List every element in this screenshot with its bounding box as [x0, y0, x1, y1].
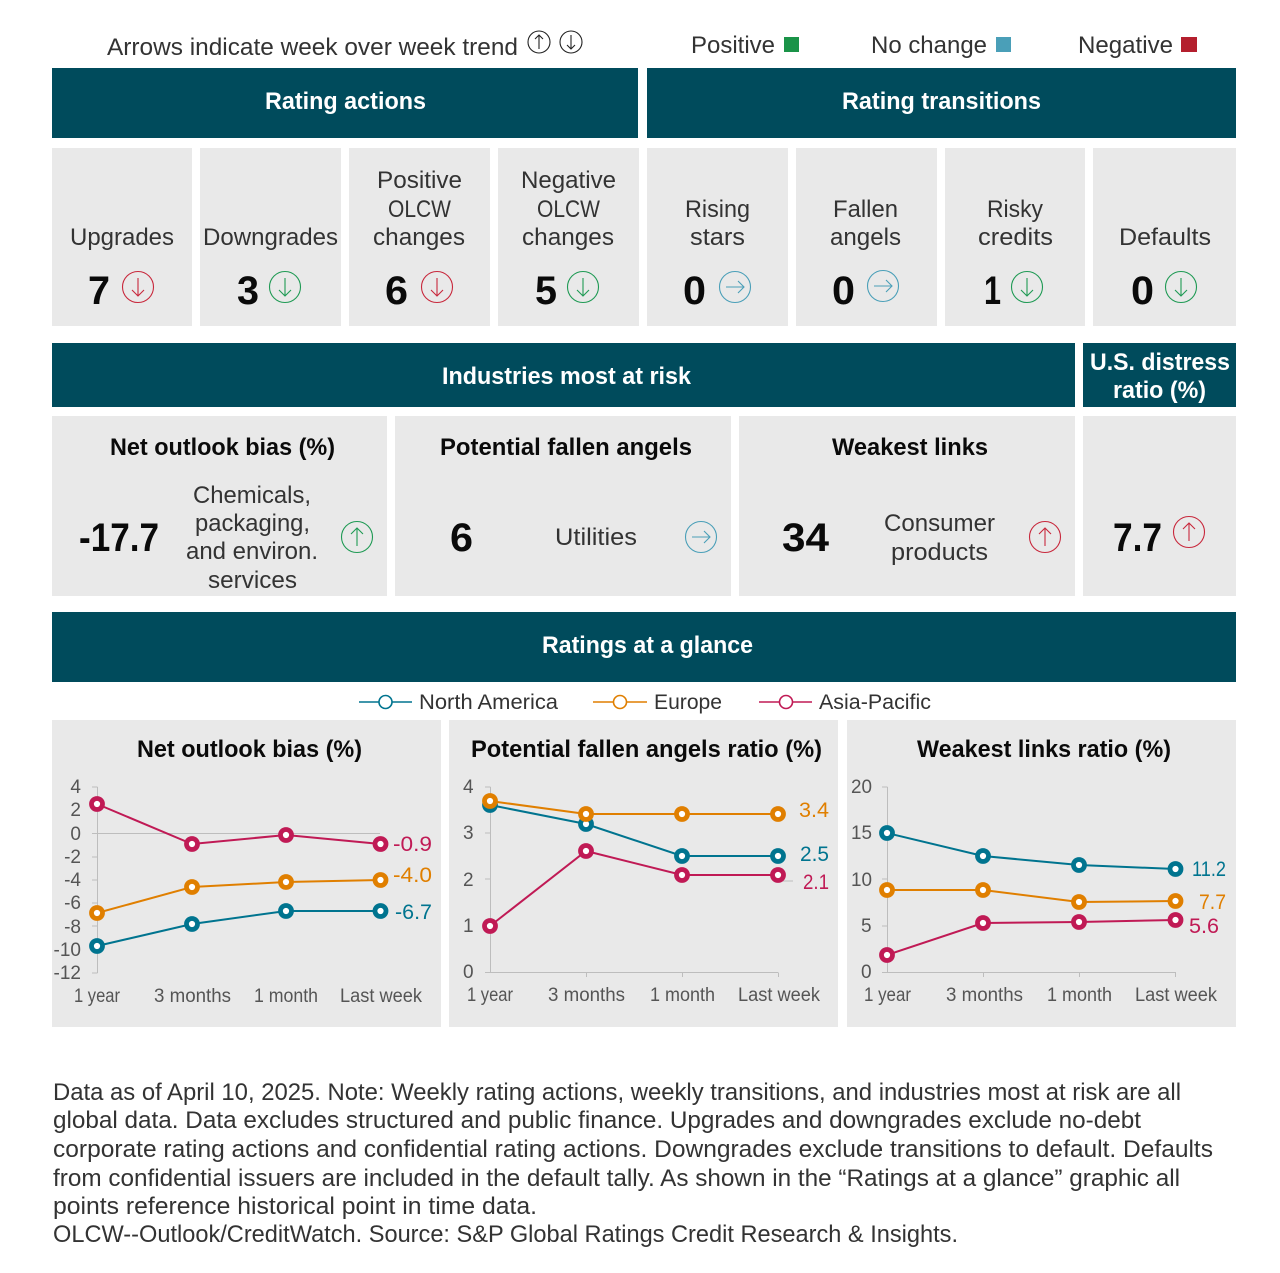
card: fallen angels: 0 — [832, 269, 855, 313]
panel: potential fallen angels: 6 — [450, 516, 473, 560]
card: rising stars: 0 — [683, 269, 706, 313]
footnote: points reference historical point in time data. — [53, 1193, 537, 1220]
card: positive OLCW changes: Positive — [377, 167, 462, 194]
chart legend: Asia-Pacific: Asia-Pacific — [819, 691, 931, 714]
chart panel: net outlook bias: -10 — [54, 940, 81, 961]
chart panel: weakest links ratio: Last week — [1135, 985, 1217, 1006]
header: U.S. distress ratio: ratio (%) — [1113, 377, 1206, 404]
legend: positive: Positive — [691, 32, 775, 59]
chart panel: potential fallen angels ratio: 1 year — [467, 985, 514, 1006]
chart panel: potential fallen angels ratio: 3.4 — [799, 799, 829, 822]
card: upgrades — [52, 148, 192, 326]
card: rising stars: Rising — [685, 196, 750, 223]
chart panel: potential fallen angels ratio: 1 — [463, 916, 474, 937]
chart legend: Europe: Europe — [654, 691, 722, 714]
chart legend: Asia-Pacific — [759, 691, 931, 714]
chart panel: net outlook bias: -6 — [64, 893, 81, 914]
panel: U.S. distress ratio: 7.7 — [1113, 516, 1162, 560]
chart legend: Europe — [593, 691, 722, 714]
panel: potential fallen angels — [395, 416, 731, 596]
panel: potential fallen angels: Utilities — [555, 524, 637, 551]
chart panel: net outlook bias — [52, 720, 441, 1027]
header: rating actions — [52, 68, 638, 138]
footnote: corporate rating actions and confidential rating actions. Downgrades exclude transitions to default. Defaults — [53, 1136, 1213, 1163]
card: risky credits — [945, 148, 1085, 326]
chart panel: net outlook bias: Net outlook bias (%) — [137, 736, 362, 763]
chart panel: potential fallen angels ratio: 2.5 — [800, 843, 829, 866]
chart panel: potential fallen angels ratio — [449, 720, 838, 1027]
chart panel: weakest links ratio: 15 — [851, 823, 872, 844]
panel: net outlook bias: Chemicals, — [193, 482, 311, 509]
footnote: global data. Data excludes structured and public finance. Upgrades and downgrades exclude no-debt — [53, 1107, 1141, 1134]
card: risky credits: 1 — [984, 269, 1001, 313]
chart panel: potential fallen angels ratio: Last week — [738, 985, 820, 1006]
chart panel: potential fallen angels ratio: 4 — [463, 777, 474, 798]
header: U.S. distress ratio: U.S. distress — [1090, 349, 1230, 376]
card: positive OLCW changes: OLCW — [388, 196, 451, 223]
card: defaults: Defaults — [1119, 224, 1211, 251]
chart panel: net outlook bias: -4 — [64, 870, 81, 891]
panel: net outlook bias: Net outlook bias (%) — [110, 434, 335, 461]
chart panel: potential fallen angels ratio: 3 — [463, 823, 474, 844]
chart panel: potential fallen angels ratio: 0 — [463, 962, 474, 983]
header: U.S. distress ratio — [1083, 343, 1236, 407]
legend: negative: Negative — [1078, 32, 1173, 59]
chart panel: weakest links ratio: 3 months — [946, 985, 1023, 1006]
card: downgrades: Downgrades — [203, 224, 338, 251]
chart panel: potential fallen angels ratio: Potential fallen angels ratio (%) — [471, 736, 822, 763]
card: upgrades: Upgrades — [70, 224, 174, 251]
chart panel: potential fallen angels ratio: 2.1 — [803, 871, 829, 894]
panel: net outlook bias: -17.7 — [79, 516, 159, 560]
card: fallen angels: angels — [830, 224, 901, 251]
chart panel: potential fallen angels ratio: 3 months — [548, 985, 625, 1006]
chart panel: net outlook bias: Last week — [340, 986, 422, 1007]
card: positive OLCW changes: changes — [373, 224, 465, 251]
card: negative OLCW changes — [498, 148, 639, 326]
header: rating actions: Rating actions — [265, 88, 426, 115]
footnote: OLCW--Outlook/CreditWatch. Source: S&P Global Ratings Credit Research & Insights. — [53, 1221, 958, 1248]
panel: weakest links: Consumer — [884, 510, 995, 537]
chart panel: net outlook bias: -6.7 — [395, 901, 432, 924]
chart panel: net outlook bias: 1 month — [254, 986, 318, 1007]
chart panel: net outlook bias: -12 — [54, 963, 81, 984]
panel: net outlook bias: services — [208, 567, 297, 594]
card: risky credits: credits — [978, 224, 1053, 251]
chart panel: net outlook bias: 0 — [70, 824, 81, 845]
chart panel: weakest links ratio: 10 — [851, 870, 872, 891]
chart panel: net outlook bias: -2 — [64, 847, 81, 868]
card: fallen angels — [796, 148, 937, 326]
chart panel: net outlook bias: -8 — [64, 917, 81, 938]
header: ratings at a glance: Ratings at a glance — [542, 632, 753, 659]
panel: weakest links: products — [891, 539, 988, 566]
panel: weakest links — [739, 416, 1075, 596]
card: negative OLCW changes: 5 — [535, 269, 557, 313]
card: downgrades — [200, 148, 341, 326]
card: negative OLCW changes: changes — [522, 224, 614, 251]
header: industries most at risk — [52, 343, 1075, 407]
chart panel: potential fallen angels ratio: 1 month — [650, 985, 715, 1006]
chart panel: weakest links ratio: 7.7 — [1199, 891, 1226, 914]
panel: U.S. distress ratio — [1083, 416, 1236, 596]
card: defaults — [1093, 148, 1236, 326]
panel: weakest links: Weakest links — [832, 434, 988, 461]
card: negative OLCW changes: Negative — [521, 167, 616, 194]
legend: no change: No change — [871, 32, 987, 59]
footnote: from confidential issuers are included in the default tally. As shown in the “Ratings at a glance” graphic all — [53, 1165, 1180, 1192]
header: industries most at risk: Industries most at risk — [442, 363, 692, 390]
chart panel: potential fallen angels ratio: 2 — [463, 870, 474, 891]
panel: potential fallen angels: Potential fallen angels — [440, 434, 692, 461]
panel: weakest links: 34 — [782, 516, 830, 560]
chart panel: net outlook bias: 1 year — [74, 986, 121, 1007]
chart panel: weakest links ratio: 5 — [861, 916, 872, 937]
arrows key: Arrows indicate week over week trend — [107, 34, 518, 61]
chart panel: weakest links ratio: Weakest links ratio (%) — [917, 736, 1171, 763]
chart panel: net outlook bias: -4.0 — [393, 864, 432, 887]
header: rating transitions — [647, 68, 1236, 138]
card: rising stars: stars — [690, 224, 745, 251]
card: defaults: 0 — [1131, 269, 1154, 313]
chart panel: weakest links ratio: 1 month — [1047, 985, 1112, 1006]
chart panel: weakest links ratio — [847, 720, 1236, 1027]
panel: net outlook bias — [52, 416, 387, 596]
card: rising stars — [647, 148, 788, 326]
panel: net outlook bias: packaging, — [195, 510, 310, 537]
footnote — [53, 1079, 1213, 1248]
header: rating transitions: Rating transitions — [842, 88, 1041, 115]
card: risky credits: Risky — [987, 196, 1043, 223]
chart panel: weakest links ratio: 5.6 — [1189, 915, 1219, 938]
chart panel: net outlook bias: 4 — [70, 777, 81, 798]
card: fallen angels: Fallen — [833, 196, 898, 223]
chart panel: net outlook bias: -0.9 — [393, 833, 432, 856]
card: upgrades: 7 — [88, 269, 110, 313]
card: positive OLCW changes — [349, 148, 490, 326]
chart panel: net outlook bias: 2 — [70, 800, 81, 821]
chart panel: weakest links ratio: 1 year — [864, 985, 912, 1006]
chart panel: net outlook bias: 3 months — [154, 986, 231, 1007]
footnote: Data as of April 10, 2025. Note: Weekly rating actions, weekly transitions, and industries most at risk are all — [53, 1079, 1181, 1106]
header: ratings at a glance — [52, 612, 1236, 682]
chart legend: North America — [359, 691, 558, 714]
card: downgrades: 3 — [237, 269, 259, 313]
chart panel: weakest links ratio: 0 — [861, 962, 872, 983]
panel: net outlook bias: and environ. — [186, 538, 318, 565]
chart legend: North America: North America — [419, 691, 558, 714]
card: positive OLCW changes: 6 — [385, 269, 408, 313]
chart panel: weakest links ratio: 11.2 — [1192, 858, 1226, 881]
card: negative OLCW changes: OLCW — [537, 196, 600, 223]
chart panel: weakest links ratio: 20 — [851, 777, 872, 798]
